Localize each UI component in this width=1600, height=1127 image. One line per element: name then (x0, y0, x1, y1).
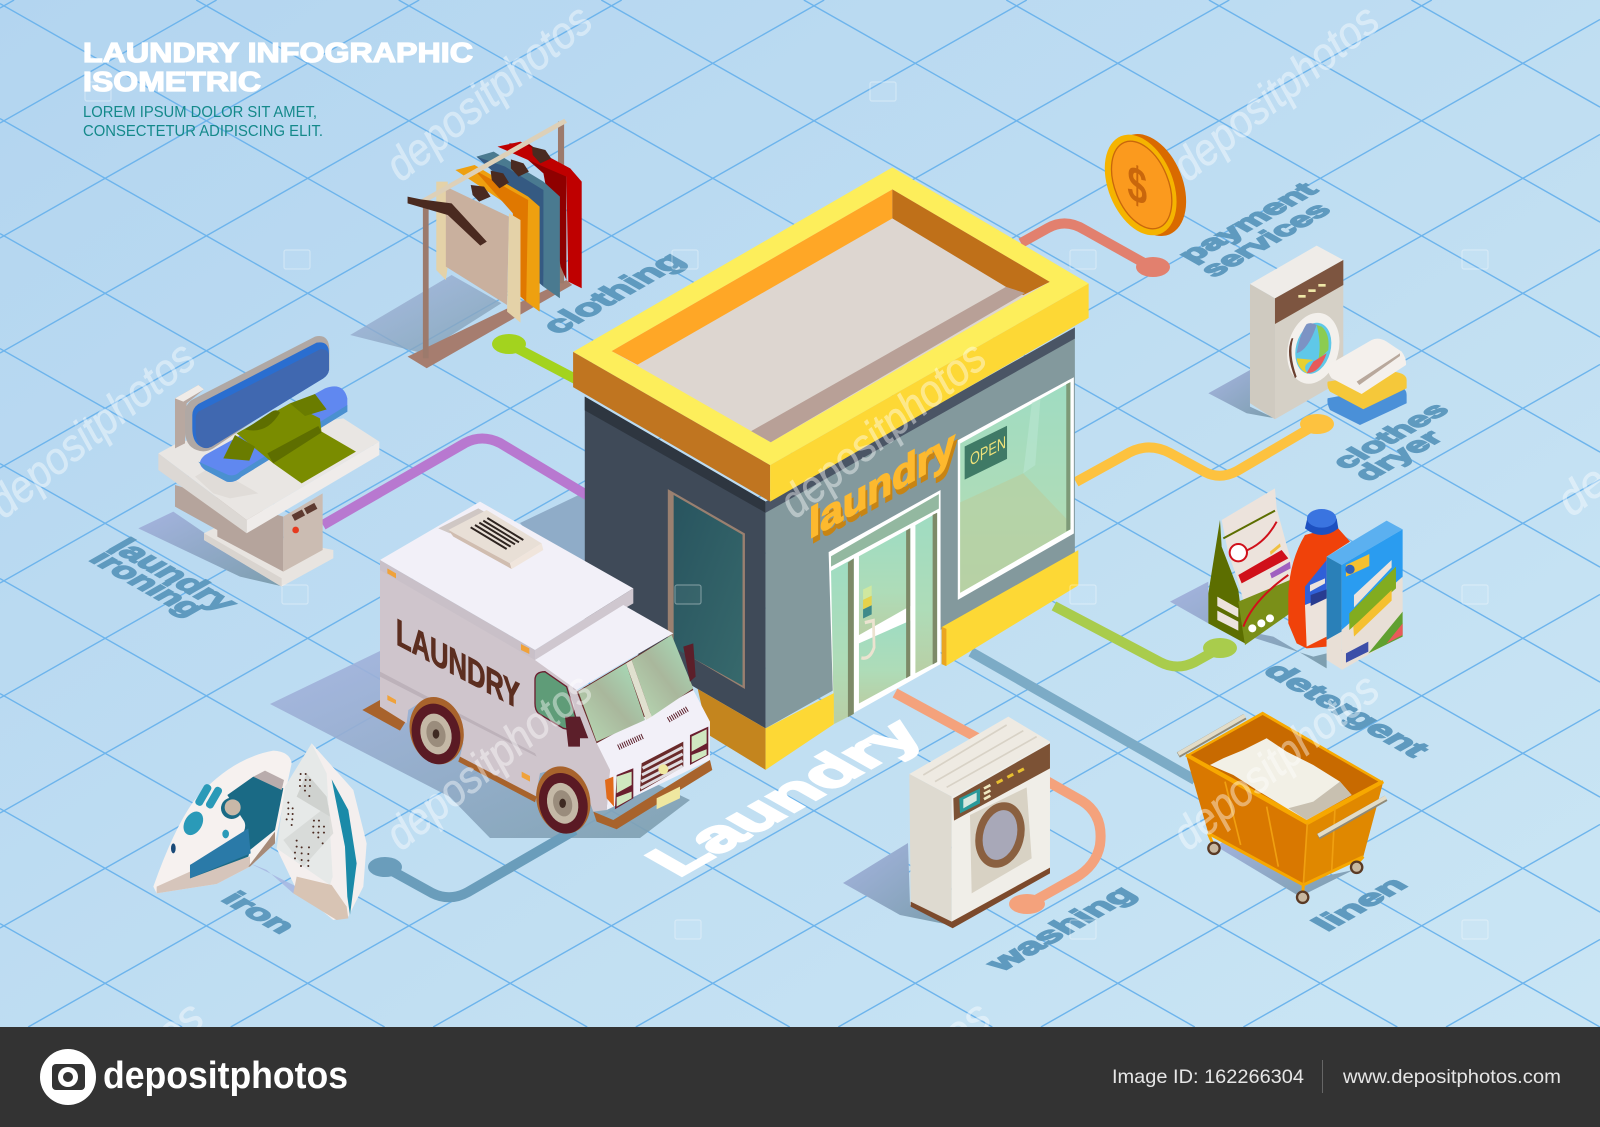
roof (573, 167, 1089, 502)
label: washing: washing (977, 881, 1144, 976)
sign text: laundry: laundry (809, 419, 955, 548)
website: www.depositphotos.com (1342, 1066, 1561, 1088)
bumper (593, 760, 712, 829)
side window (535, 672, 580, 732)
icon: coin: $ (1127, 155, 1147, 218)
icon: coin (1091, 123, 1200, 247)
icon: irons (153, 743, 367, 920)
heading: ISOMETRIC (83, 66, 261, 97)
label: linen: linen (1305, 873, 1415, 935)
label: payment services: payment (1170, 179, 1324, 266)
title block (83, 37, 473, 140)
roof vent (438, 508, 543, 569)
vents (618, 708, 688, 747)
iron upright (277, 743, 367, 920)
icon: washing machine (843, 717, 1050, 928)
windshield (577, 635, 693, 743)
label: laundry ironing: laundry (102, 533, 248, 616)
ground shadow: building and van (270, 492, 690, 838)
door (829, 490, 941, 724)
icon: detergent products (1170, 488, 1403, 670)
shop window (958, 377, 1074, 600)
icon: ironing press machine (138, 336, 379, 587)
label: clothing: clothing (533, 248, 693, 338)
sign text: open: OPEN (970, 432, 1006, 470)
heading (83, 37, 473, 97)
steam holes (286, 773, 325, 867)
sign text: laundry: laundry (811, 424, 957, 553)
label: iron: iron (214, 888, 303, 938)
subtitle (83, 104, 323, 140)
image id: Image ID: 162266304 (1112, 1066, 1304, 1088)
wheels (403, 691, 597, 839)
footer bar (0, 1027, 1600, 1127)
connector: ironing purple (323, 438, 590, 525)
front wall (766, 327, 1075, 728)
label: clothes dryer: clothes (1324, 398, 1456, 473)
label: payment services (1170, 179, 1338, 281)
powder box (1327, 521, 1403, 670)
heading: LAUNDRY INFOGRAPHIC (83, 37, 473, 68)
icon: dryer and towels (1208, 246, 1407, 425)
iron flat (153, 751, 292, 893)
connector: detergent green (1054, 606, 1237, 666)
plinth corner (698, 689, 766, 770)
left wall (585, 397, 766, 728)
plinth right (942, 550, 1078, 666)
wheels (1208, 843, 1362, 903)
open sign (965, 426, 1007, 480)
connector: linen blue (971, 652, 1195, 780)
label: detergent: detergent (1256, 658, 1438, 761)
bottle (1288, 509, 1350, 648)
connector: iron blue (368, 830, 575, 897)
connector: clothing green (492, 334, 585, 384)
drum (1290, 319, 1337, 378)
subtitle: CONSECTETUR ADIPISCING ELIT. (83, 123, 323, 140)
watermarks: depositphotos (769, 331, 996, 528)
connector: payment salmon (1021, 223, 1170, 277)
linen (1210, 738, 1352, 820)
label: payment services: services (1192, 198, 1338, 281)
label: clothes dryer: dryer (1346, 426, 1450, 485)
icon: delivery van (362, 502, 712, 839)
van lettering: LAUNDRY (396, 611, 520, 718)
powder bag (1208, 488, 1292, 645)
subtitle: LOREM IPSUM DOLOR SIT AMET, (83, 104, 317, 121)
icon: laundry cart (1178, 712, 1386, 903)
shirt (223, 394, 356, 483)
watermarks: os (144, 990, 213, 1060)
left window (668, 489, 745, 689)
connector: dryer yellow (1076, 414, 1334, 482)
panel: laundry building (573, 167, 1089, 770)
marker lights (387, 568, 530, 782)
icon: clothes rack (350, 121, 582, 368)
hangers (408, 147, 551, 246)
label: clothes dryer (1324, 398, 1456, 485)
connector: washing orange (895, 693, 1101, 914)
watermarks: depositphotos (375, 663, 602, 860)
logo wordmark: depositphotos (103, 1055, 348, 1097)
front (597, 690, 710, 810)
towels (1327, 339, 1407, 425)
watermarks: os (931, 990, 1000, 1060)
floor label: Laundry: Laundry (631, 710, 939, 884)
label: laundry ironing: ironing (82, 546, 213, 621)
logo mark (40, 1049, 96, 1105)
watermarks: depositphotos (1162, 663, 1389, 860)
